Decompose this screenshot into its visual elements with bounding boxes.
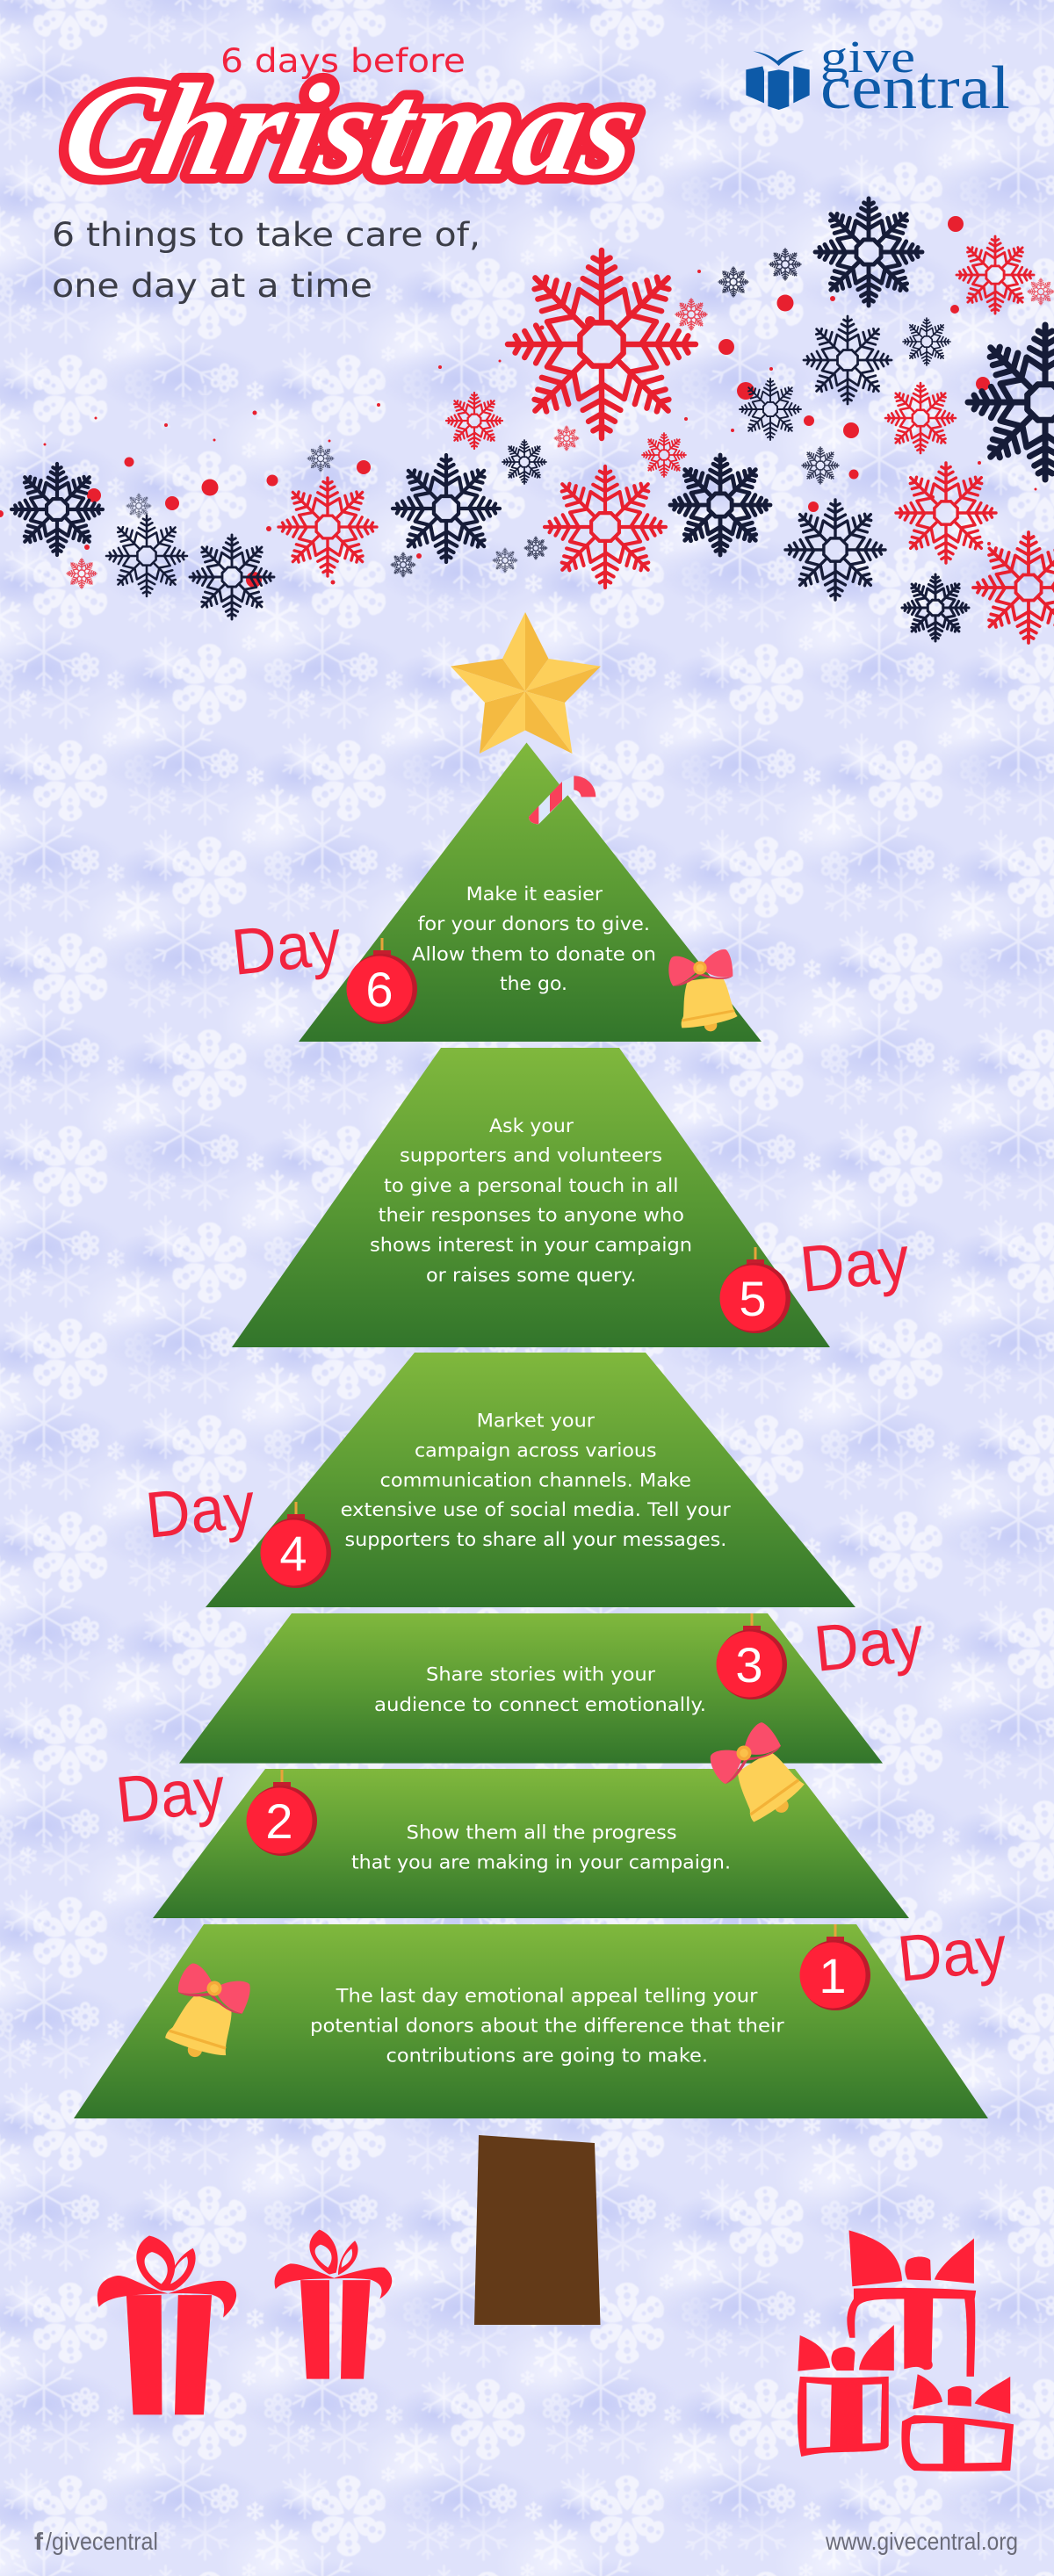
tree tier: day 4 xyxy=(206,1353,855,1607)
icon: gift with bird xyxy=(746,50,810,110)
headline: Christmas script with red outline: Christmas xyxy=(52,56,652,203)
icon: candy cane xyxy=(529,776,596,824)
tier text: supporters and volunteers xyxy=(400,1145,662,1166)
tier text: Ask your xyxy=(489,1115,574,1136)
tier text: Share stories with your xyxy=(426,1663,655,1685)
navy snowflakes xyxy=(11,198,1054,641)
tier text xyxy=(370,1115,692,1286)
bauble: day 2: 2 xyxy=(265,1793,293,1849)
subtitle: one day at a time xyxy=(52,267,372,305)
subtitle: 6 things to take care of, xyxy=(52,216,480,254)
bauble: day 3 xyxy=(717,1613,787,1699)
gift box stack xyxy=(798,2230,1014,2471)
logo: give central xyxy=(746,32,1010,122)
tree trunk xyxy=(474,2135,601,2325)
icon: bell on day 6 tier xyxy=(668,949,738,1031)
red dots xyxy=(0,216,1036,588)
tier text: campaign across various xyxy=(415,1440,657,1461)
bauble: day 4: 4 xyxy=(279,1526,307,1581)
tier text: for your donors to give. xyxy=(418,913,650,934)
tier text: extensive use of social media. Tell your xyxy=(341,1499,731,1520)
tier text: or raises some query. xyxy=(426,1265,636,1286)
day label 2: Day xyxy=(112,1752,228,1836)
logo wordmark: give: give xyxy=(820,32,915,83)
bauble: day 5 xyxy=(720,1247,790,1333)
tier text: Make it easier xyxy=(466,884,603,905)
day label 5: Day xyxy=(797,1222,913,1306)
day label 4: Day xyxy=(142,1468,258,1552)
tier text: The last day emotional appeal telling your xyxy=(336,1986,758,2007)
headline: 6 days before: 6 days before xyxy=(220,42,466,80)
footer: website: www.givecentral.org xyxy=(825,2528,1018,2555)
tier text xyxy=(310,1986,784,2066)
day label 3: Day xyxy=(811,1601,927,1685)
footer: facebook handle: /givecentral xyxy=(46,2528,158,2555)
bauble: day 1: 1 xyxy=(819,1948,847,2003)
day label 1: Day xyxy=(894,1911,1010,1995)
day label 6: Day xyxy=(228,905,344,989)
tree tier: day 3 xyxy=(179,1613,883,1764)
tier text xyxy=(412,884,656,994)
bauble: day 4 xyxy=(260,1502,331,1588)
tier text: that you are making in your campaign. xyxy=(351,1852,731,1873)
icon: bell on day 1 tier xyxy=(150,1954,261,2070)
tree tier: day 5 xyxy=(232,1048,830,1347)
tier text: Allow them to donate on xyxy=(412,944,656,965)
bauble: day 2 xyxy=(246,1770,317,1856)
tier text: Market your xyxy=(477,1411,595,1432)
subtitle xyxy=(52,216,480,305)
gift box two xyxy=(275,2230,392,2379)
decorative snowflake garland xyxy=(0,198,1054,643)
bauble: day 3: 3 xyxy=(735,1637,763,1692)
icon: bell on day 3 tier xyxy=(704,1717,812,1832)
tier text xyxy=(374,1663,706,1715)
tier text: potential donors about the difference that their xyxy=(310,2016,784,2037)
tier text: audience to connect emotionally. xyxy=(374,1694,706,1715)
red snowflakes xyxy=(67,236,1054,643)
tree tier: day 2 xyxy=(153,1769,909,1918)
gift box one xyxy=(97,2235,236,2414)
logo wordmark: central: central xyxy=(820,54,1010,122)
tree tier: day 6 xyxy=(299,743,762,1042)
tier text xyxy=(341,1411,731,1550)
bauble: day 6 xyxy=(346,938,417,1024)
bauble: day 5: 5 xyxy=(739,1271,767,1326)
tier text xyxy=(351,1822,731,1873)
icon: star xyxy=(451,612,601,754)
tier text: shows interest in your campaign xyxy=(370,1235,692,1256)
tier text: Show them all the progress xyxy=(407,1822,677,1844)
bauble: day 1 xyxy=(799,1924,870,2010)
tier text: to give a personal touch in all xyxy=(384,1175,678,1196)
tier text: contributions are going to make. xyxy=(386,2045,708,2066)
tier text: communication channels. Make xyxy=(379,1470,691,1491)
tier text: their responses to anyone who xyxy=(379,1205,684,1226)
tier text: supporters to share all your messages. xyxy=(344,1529,726,1550)
tier text: the go. xyxy=(500,973,567,994)
bauble: day 6: 6 xyxy=(365,962,393,1017)
tree tier: day 1 xyxy=(74,1924,988,2118)
footer: facebook handle: f xyxy=(34,2528,44,2555)
